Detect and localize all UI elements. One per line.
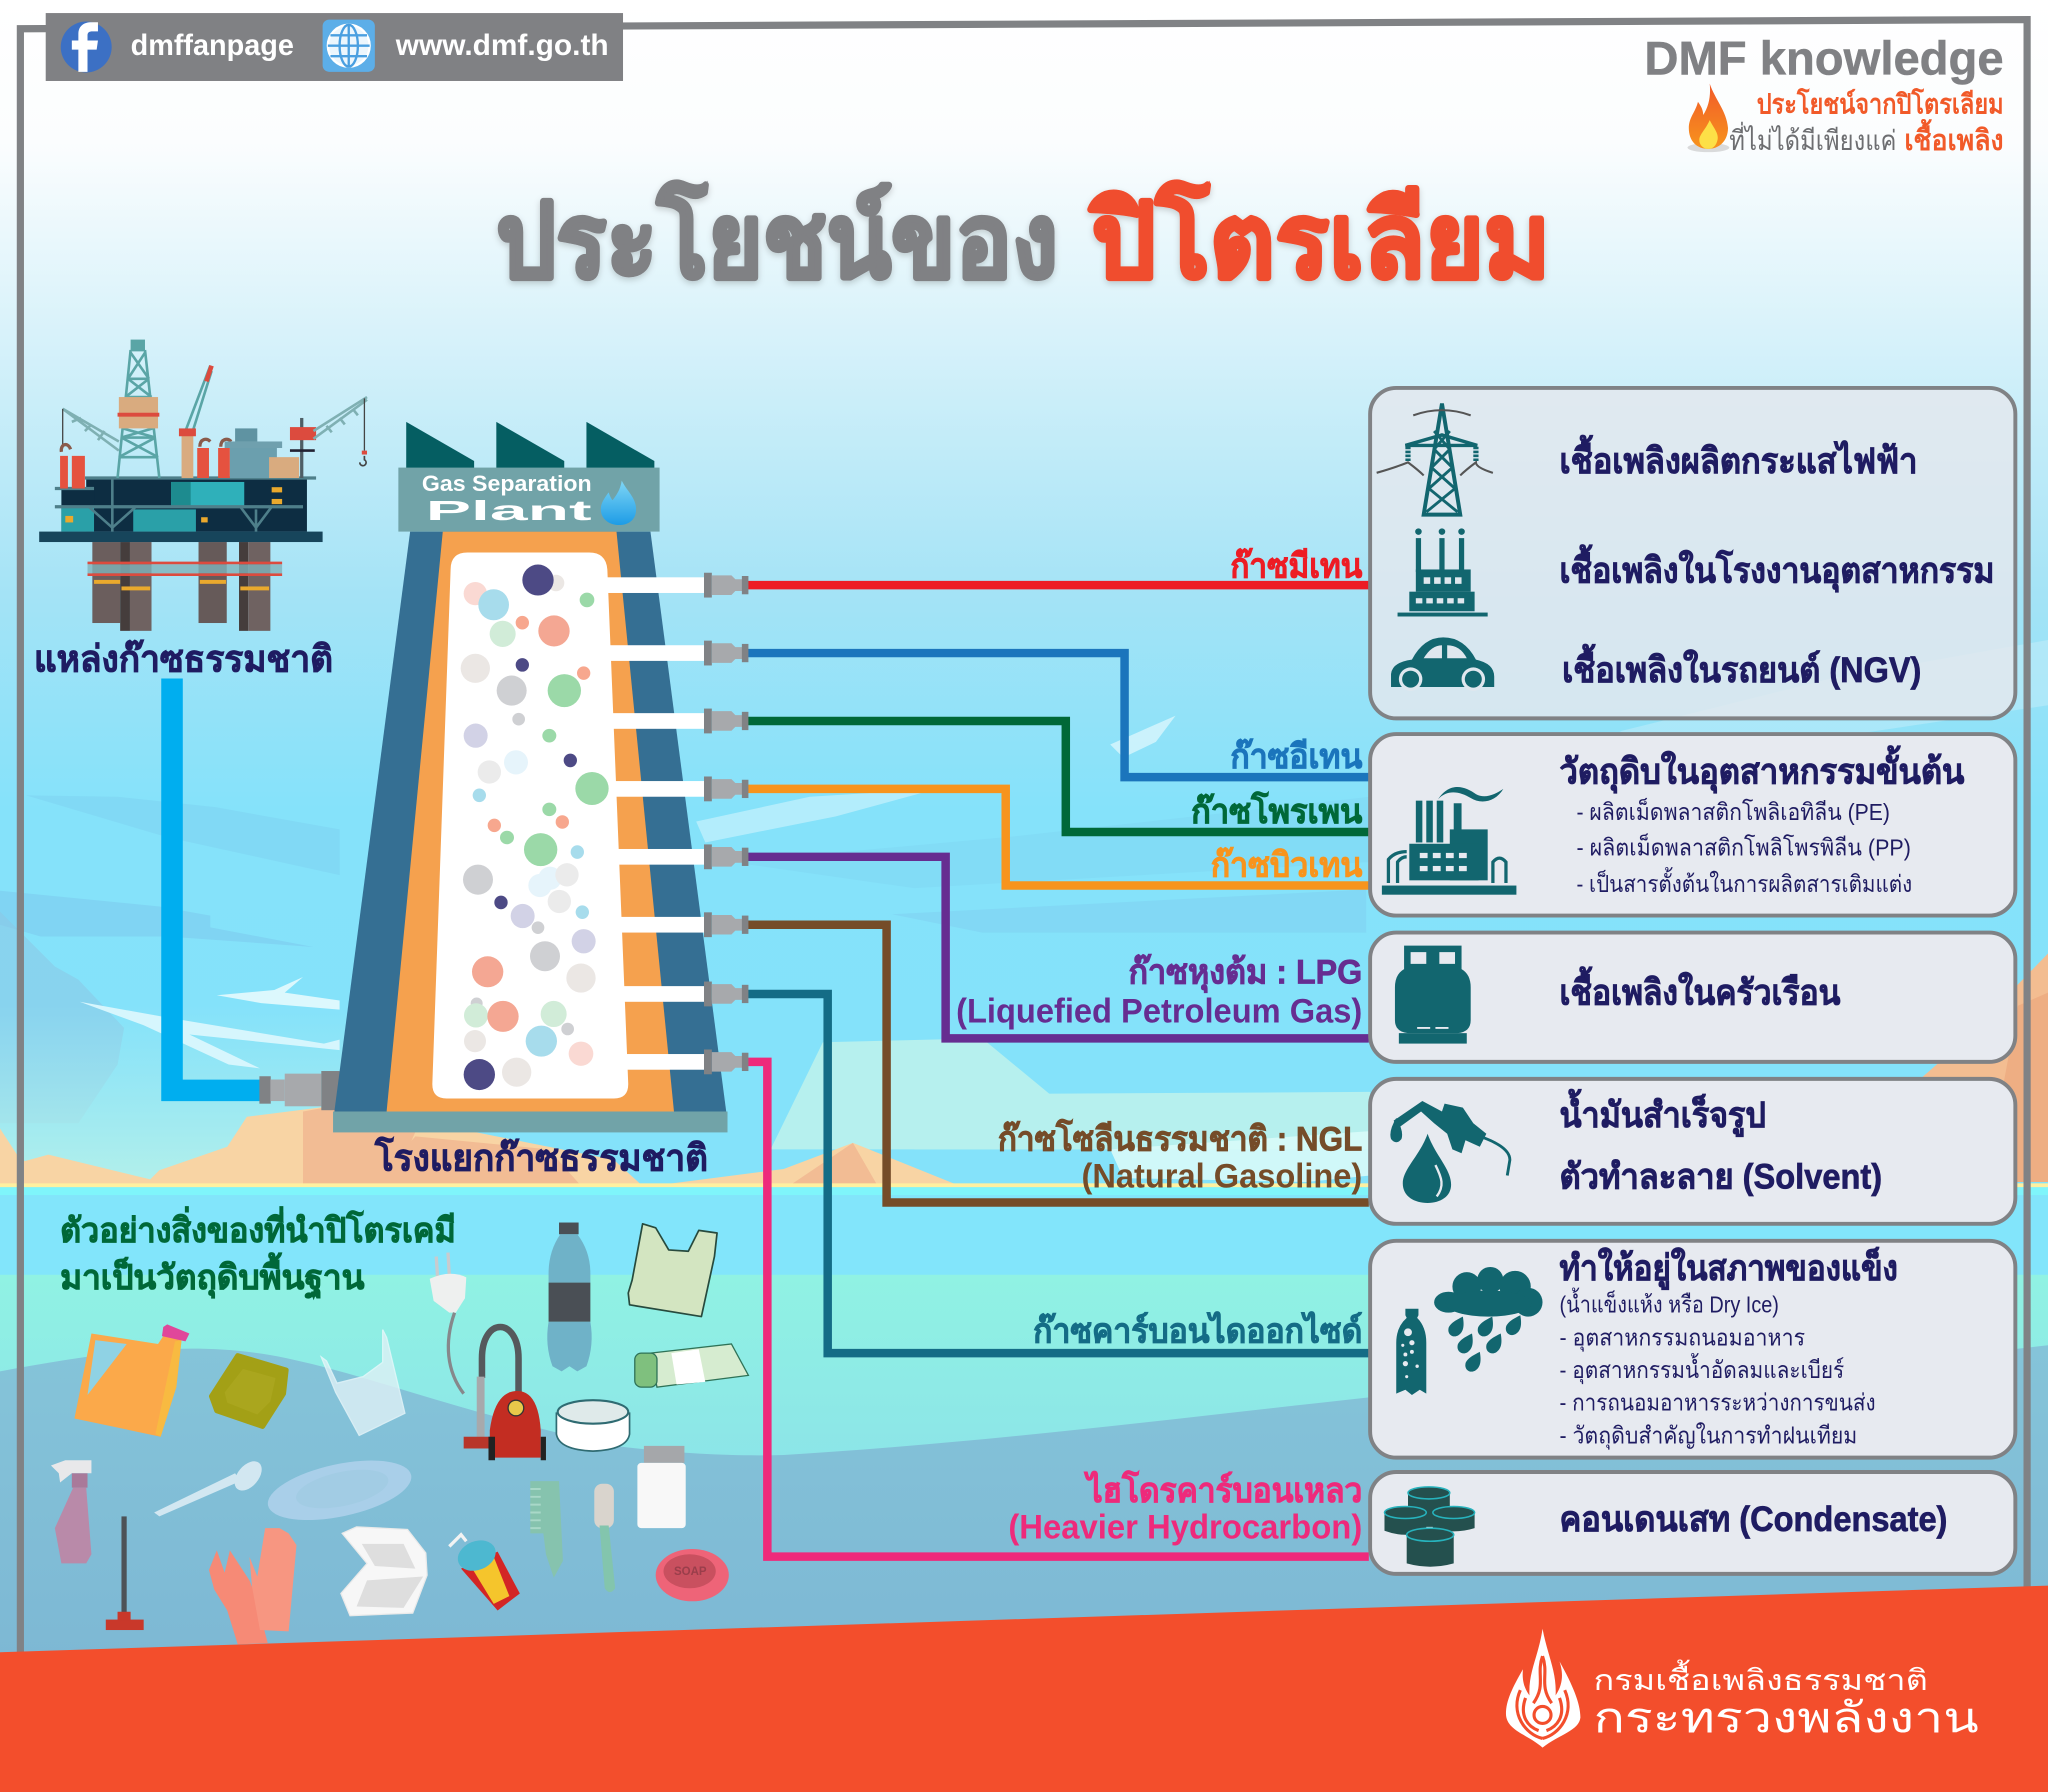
- text: household fuel: เชื้อเพลิงในครัวเรือน: [1560, 966, 1840, 1012]
- label: heavier hydrocarbon: ไฮโดรคาร์บอนเหลว: [1083, 1470, 1362, 1510]
- derrick: [118, 350, 159, 478]
- text: dry ice items: - อุตสาหกรรมถนอมอาหาร: [1560, 1324, 1805, 1351]
- icon: storage tanks: [1384, 1487, 1475, 1567]
- label: NGL: ก๊าซโซลีนธรรมชาติ : NGL: [998, 1119, 1362, 1159]
- text: factory fuel: เชื้อเพลิงในโรงงานอุตสาหกรรม: [1560, 545, 1994, 593]
- icon: facebook: [61, 22, 112, 72]
- heading: petrochemical examples: ตัวอย่างสิ่งของที่นำปิโตรเคมี: [60, 1206, 456, 1250]
- icon: industrial plant: [1398, 528, 1488, 616]
- plant sign: Plant: [426, 495, 592, 526]
- item: vacuum cleaner: [464, 1327, 546, 1460]
- item: cream jar: [556, 1400, 630, 1451]
- text: dry ice items: [1560, 1288, 1876, 1449]
- text: header subtitle fuel: เชื้อเพลิง: [1904, 119, 2004, 157]
- line: propane: [747, 721, 1369, 832]
- item: electric plug: [430, 1253, 466, 1394]
- text: electricity fuel: เชื้อเพลิงผลิตกระแสไฟฟ้า: [1560, 435, 1917, 481]
- icon: ministry flame emblem: [1506, 1629, 1580, 1748]
- text: dry ice heading: ทำให้อยู่ในสภาพของแข็ง: [1560, 1246, 1898, 1290]
- panel: fuel uses: [1370, 388, 2015, 718]
- social tag bar: [46, 13, 623, 81]
- text: header subtitle: ประโยชน์จากปิโตรเลียม: [1757, 88, 2004, 120]
- label: LPG: [956, 954, 1362, 1031]
- line: heavier hydrocarbon: [747, 1062, 1369, 1557]
- item: plate: [263, 1450, 417, 1531]
- pipe: inlet to plant: [172, 679, 261, 1090]
- label: heavier hydrocarbon: [1008, 1470, 1362, 1547]
- item: plastic spoon: [154, 1456, 267, 1516]
- line: ethane: [747, 653, 1369, 777]
- label: natural gas source: แหล่งก๊าซธรรมชาติ: [34, 638, 333, 679]
- text: header subtitle second line: ที่ไม่ได้มีเพียงแค่: [1729, 122, 1896, 156]
- footer logo: [1506, 1629, 1979, 1748]
- icon: offshore gas platform: [39, 340, 367, 631]
- icon: fuel nozzle and drops: [1390, 1101, 1510, 1203]
- line: LPG: [747, 857, 1369, 1038]
- line: NGL: [747, 925, 1369, 1203]
- label: NGL: [998, 1119, 1362, 1195]
- heading: petrochemical examples: [60, 1206, 456, 1300]
- item: comb: [530, 1481, 563, 1578]
- heading: petrochemical examples: มาเป็นวัตถุดิบพื้นฐาน: [60, 1252, 364, 1300]
- outlet connectors: [704, 573, 748, 1074]
- item: green carrier bag: [628, 1224, 717, 1317]
- title: ปิโตรเลียม: [1088, 181, 1550, 300]
- left crane: [63, 409, 119, 451]
- label: methane: ก๊าซมีเทน: [1230, 547, 1362, 585]
- panel: dry ice: [1370, 1241, 2015, 1458]
- text: dry ice items: - การถนอมอาหารระหว่างการขนส่ง: [1560, 1390, 1876, 1416]
- text: feedstock heading: วัตถุดิบในอุตสาหกรรมขั้นต้น: [1560, 746, 1964, 794]
- item: spray bottle: [51, 1460, 91, 1563]
- icon: car: [1391, 637, 1494, 691]
- text: condensate: คอนเดนเสท (Condensate): [1560, 1500, 1947, 1539]
- panel: household fuel: [1370, 933, 2015, 1062]
- item: orange jug: [74, 1324, 189, 1437]
- text: dry ice items: (น้ำแข็งแห้ง หรือ Dry Ice): [1560, 1288, 1779, 1318]
- text: solvent: ตัวทำละลาย (Solvent): [1560, 1158, 1882, 1197]
- plastic products illustrations: [51, 1223, 748, 1644]
- item: olive tray: [212, 1356, 286, 1426]
- label: ethane: ก๊าซอีเทน: [1230, 738, 1362, 776]
- plant base: [333, 1112, 728, 1132]
- line: carbon dioxide: [747, 994, 1369, 1353]
- label: butane: ก๊าซบิวเทน: [1211, 846, 1362, 884]
- text: dmffanpage: dmffanpage: [131, 29, 294, 62]
- text: feedstock items: - ผลิตเม็ดพลาสติกโพลิเอทิลีน (PE): [1576, 797, 1890, 825]
- panel: refined oil and solvent: [1370, 1079, 2015, 1224]
- label: heavier hydrocarbon: (Heavier Hydrocarbon): [1008, 1509, 1362, 1547]
- header: DMF knowledge: DMF knowledge: [1644, 31, 2004, 84]
- panel: industrial feedstock: [1370, 734, 2015, 916]
- item: foam box: [341, 1527, 427, 1616]
- icon: flame: [1688, 84, 1729, 152]
- icon: factory: [1382, 787, 1516, 895]
- label: LPG: (Liquefied Petroleum Gas): [956, 993, 1362, 1031]
- icon: LPG cylinder: [1395, 946, 1471, 1044]
- footer band: [0, 1586, 2048, 1792]
- item: drink bottle: [547, 1223, 592, 1371]
- text: website: www.dmf.go.th: [395, 29, 609, 62]
- title: ประโยชน์ของ: [496, 181, 1058, 300]
- right crane: [300, 418, 303, 478]
- text: ministry of energy: กระทรวงพลังงาน: [1593, 1694, 1979, 1741]
- icon: power pylon: [1377, 404, 1493, 515]
- roof vents: [406, 422, 654, 469]
- line: butane: [747, 789, 1369, 886]
- text: feedstock items: [1576, 797, 1912, 897]
- icon: soda bottle: [1396, 1309, 1426, 1395]
- text: dry ice items: - วัตถุดิบสำคัญในการทำฝนเทียม: [1560, 1422, 1857, 1449]
- plant sign: Gas Separation: [422, 471, 592, 496]
- item: soap: [656, 1549, 729, 1601]
- icon: rain cloud: [1434, 1267, 1543, 1372]
- item: rubber gloves: [209, 1528, 296, 1644]
- middle crane: [185, 366, 212, 434]
- text: department of mineral fuels: กรมเชื้อเพลิงธรรมชาติ: [1593, 1660, 1928, 1697]
- label: NGL: (Natural Gasoline): [1081, 1157, 1362, 1195]
- header: DMF knowledge: [1644, 31, 2004, 157]
- label: LPG: ก๊าซหุงต้ม : LPG: [1128, 954, 1362, 994]
- text: feedstock items: - ผลิตเม็ดพลาสติกโพลิโพรพิลีน (PP): [1576, 833, 1911, 861]
- outlet pipes: [603, 577, 705, 1070]
- label: gas separation plant: โรงแยกก๊าซธรรมชาติ: [374, 1136, 708, 1178]
- line: methane: [747, 582, 1369, 588]
- text: refined oil: น้ำมันสำเร็จรูป: [1560, 1089, 1766, 1137]
- item: white carrier bag: [321, 1330, 405, 1435]
- bubbles: [461, 565, 609, 1090]
- label: carbon dioxide: ก๊าซคาร์บอนไดออกไซด์: [1033, 1312, 1362, 1351]
- text: dry ice items: - อุตสาหกรรมน้ำอัดลมและเบียร์: [1560, 1353, 1844, 1384]
- item: tumbler with straw: [449, 1535, 520, 1610]
- panel: condensate: [1370, 1472, 2015, 1574]
- tower body: [334, 532, 726, 1112]
- text: NGV fuel: เชื้อเพลิงในรถยนต์ (NGV): [1562, 644, 1921, 690]
- connector: inlet: [259, 1071, 340, 1110]
- label: propane: ก๊าซโพรเพน: [1191, 791, 1362, 831]
- coloured gas lines: [747, 585, 1369, 1557]
- icon: globe: [323, 20, 375, 72]
- gas separation plant: [333, 422, 748, 1132]
- plant sign: [398, 468, 660, 532]
- item: toothbrush: [594, 1484, 615, 1592]
- item: cream tube: [635, 1344, 748, 1387]
- item: floor brush: [106, 1516, 144, 1630]
- item: soap: SOAP: [674, 1565, 707, 1578]
- item: white bottle: [637, 1446, 686, 1528]
- text: feedstock items: - เป็นสารตั้งต้นในการผลิตสารเติมแต่ง: [1576, 867, 1912, 897]
- title: [496, 181, 1550, 300]
